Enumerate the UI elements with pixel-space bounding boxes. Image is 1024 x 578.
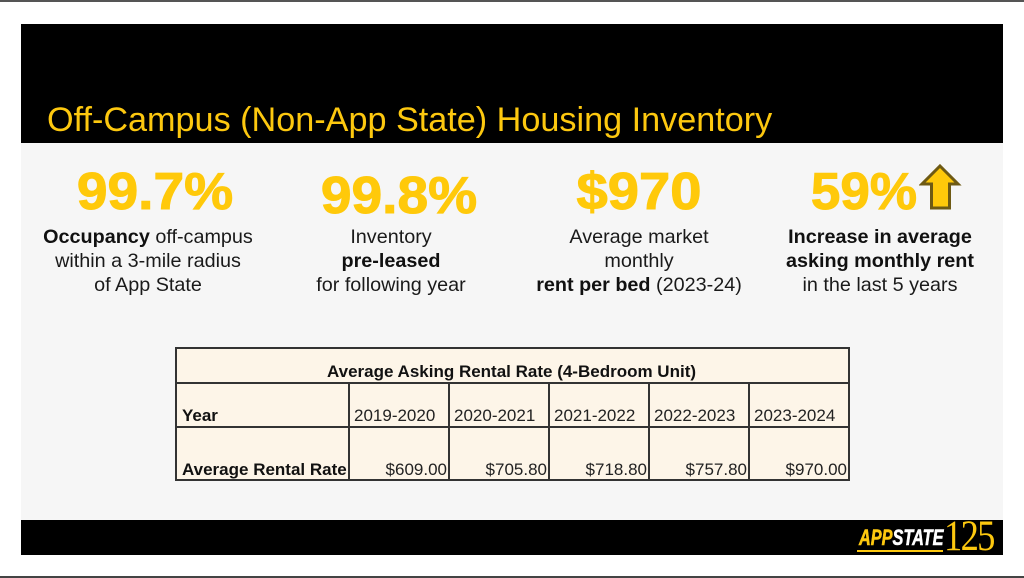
top edge line [0,0,1024,2]
stat: rent increase description [786,226,974,296]
stat: rent increase description: asking monthly rent [786,250,974,272]
header band [21,24,1003,143]
stat: pre-leased description: for following year [316,274,466,296]
year row: 2021-2022 [554,406,635,425]
stat: occupancy number: 99.7% [77,163,233,221]
stat: pre-leased description: Inventory [350,226,432,248]
logo: App State 125: APPSTATE [859,525,943,550]
icon: up arrow [919,164,962,210]
stat: rent per bed description: monthly [604,250,674,272]
table: average asking rental rate [175,347,850,481]
stat: pre-leased description [316,226,466,296]
average rental rate row: Average Rental Rate [182,460,347,479]
stat: rent per bed description [536,226,742,296]
year row: Year [182,406,218,425]
title: Off-Campus (Non-App State) Housing Inventory [47,101,772,139]
table heading: Average Asking Rental Rate (4-Bedroom Unit) [327,362,696,381]
stat: occupancy description: within a 3-mile radius [55,250,241,272]
year row: 2019-2020 [354,406,435,425]
average rental rate row: $757.80 [686,460,747,479]
bottom edge line [0,576,1024,578]
stat: rent increase number: 59% [811,163,917,221]
footer band [21,520,1003,555]
stat: occupancy description: of App State [94,274,202,296]
stat: occupancy description [43,226,253,296]
stat: pre-leased number: 99.8% [321,167,477,225]
average rental rate row: $609.00 [386,460,447,479]
year row: 2023-2024 [754,406,835,425]
average rental rate row: $705.80 [486,460,547,479]
year row: 2022-2023 [654,406,735,425]
stat: rent increase description: in the last 5 years [802,274,958,296]
stat: occupancy description: Occupancy off-campus [43,226,253,248]
stat: rent per bed number: $970 [577,163,701,221]
average rental rate row: $718.80 [586,460,647,479]
average rental rate row: $970.00 [786,460,847,479]
year row [182,406,835,425]
stat: pre-leased description: pre-leased [342,250,440,272]
year row: 2020-2021 [454,406,535,425]
logo: App State 125: 125 [944,513,994,560]
stat: rent per bed description: rent per bed (2023-24) [536,274,742,296]
average rental rate row [182,460,847,479]
stat: rent per bed description: Average market [569,226,709,248]
logo: App State 125 [857,513,994,560]
stat: rent increase description: Increase in average [788,226,972,248]
